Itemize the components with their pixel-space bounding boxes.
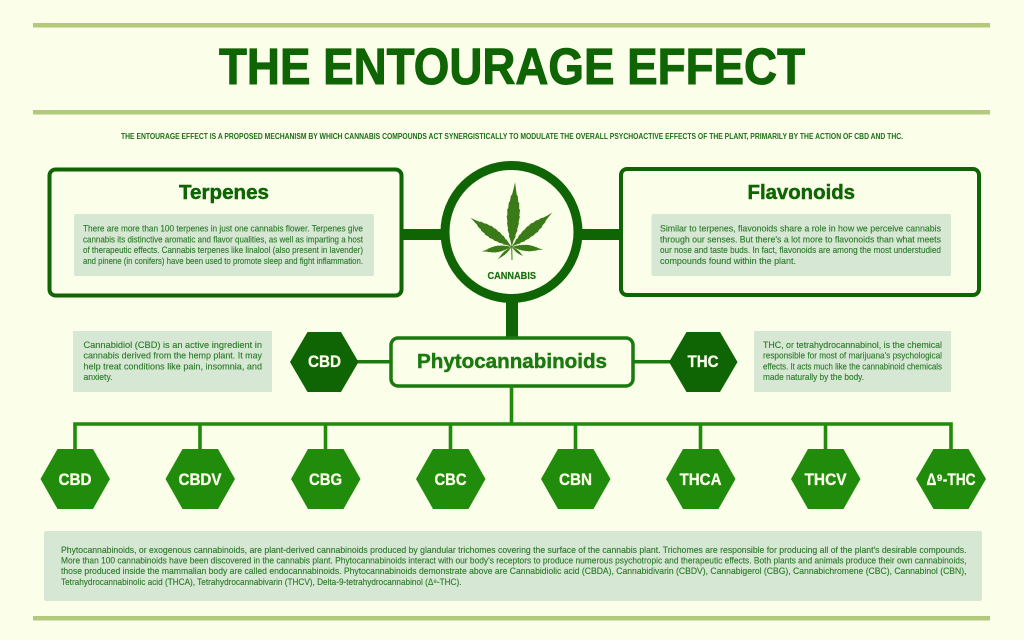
text block: CBD: help treat conditions like pain, insomnia, and	[84, 362, 262, 372]
hexagon: THCA: THCA	[680, 470, 722, 489]
text block: THC: made naturally by the body.	[763, 372, 864, 382]
text block: terpenes	[74, 214, 374, 276]
panel: phytocannabinoids: Phytocannabinoids	[417, 351, 607, 373]
branch connectors	[75, 386, 951, 451]
text block: flavonoids: our nose and taste buds. In fact, flavonoids are among the most understudied	[660, 245, 941, 255]
panel: flavonoids	[621, 169, 979, 295]
hexagon: CBC	[416, 449, 486, 509]
text block: THC	[754, 331, 951, 392]
text block: flavonoids: compounds found within the plant.	[660, 256, 796, 266]
text block: terpenes: There are more than 100 terpenes in just one cannabis flower. Terpenes give	[83, 224, 363, 234]
text block: flavonoids	[652, 214, 951, 276]
text block: flavonoids: through our senses. But there's a lot more to flavonoids than what meets	[660, 234, 942, 244]
panel: phytocannabinoids	[391, 338, 633, 386]
hexagon: delta-9-THC: Δ⁹-THC	[926, 470, 976, 489]
hexagon: CBD: CBD	[308, 352, 341, 371]
text block: CBD: cannabis derived from the hemp plant. It may	[84, 350, 263, 360]
hexagons: cannabinoids	[40, 449, 986, 509]
hexagon: CBDV: CBDV	[178, 470, 222, 489]
title: THE ENTOURAGE EFFECT	[219, 38, 805, 95]
cannabis circle	[445, 166, 578, 298]
text block: CBD: anxiety.	[84, 372, 112, 382]
text block: CBD	[73, 331, 272, 392]
connector: cannabis to flavonoids	[577, 229, 620, 240]
connector: terpenes to cannabis	[402, 229, 446, 240]
hexagon: CBG: CBG	[309, 470, 342, 489]
text block: phytocannabinoids description: Phytocannabinoids, or exogenous cannabinoids, are plant-derived cannabinoids produced by glandular trichomes covering the surface of the cannabis plant. Trichomes are responsible for producing all of the plant's desirable compounds.	[61, 545, 966, 555]
text block: THC: effects. It acts much like the cannabinoid chemicals	[763, 362, 943, 372]
hexagon: THCV	[791, 449, 860, 509]
hexagon: CBD	[40, 449, 110, 509]
text block: terpenes: of therapeutic effects. Cannabis terpenes like linalool (also present in lavender)	[83, 245, 363, 255]
label: cannabis: CANNABIS	[488, 271, 536, 282]
connector: CBD to phytocannabinoids	[356, 360, 391, 364]
text block: THC: responsible for most of marijuana's psychological	[763, 350, 942, 360]
text block: terpenes: cannabis its distinctive aromatic and flavor qualities, as well as imparting a host	[83, 234, 363, 244]
connector: phytocannabinoids to THC	[633, 360, 670, 364]
text block: phytocannabinoids description: More than 100 cannabinoids have been discovered in the cannabis plant. Phytocannabinoids interact with our body's receptors to produce numerous psychotropic and therapeutic effects. Both plants and animals produce their own cannabinoids,	[61, 556, 966, 566]
hexagon: CBD: CBD	[58, 470, 92, 489]
hexagon: CBN	[541, 449, 610, 509]
hexagon: delta-9-THC	[916, 449, 986, 509]
text block: THC: THC, or tetrahydrocannabinol, is the chemical	[763, 340, 942, 350]
heading: terpenes: Terpenes	[179, 182, 269, 204]
hexagon: CBDV	[166, 449, 235, 509]
hexagon: CBD	[290, 332, 358, 392]
text block: phytocannabinoids description: Tetrahydrocannabinolic acid (THCA), Tetrahydrocannabivarin (THCV), Delta-9-tetrahydrocannabinol (Δ⁹-THC).	[61, 577, 462, 587]
hexagon: THCV: THCV	[804, 470, 847, 489]
hexagon: CBC: CBC	[434, 470, 466, 489]
hexagon: THCA	[666, 449, 736, 509]
panel: terpenes	[50, 170, 402, 296]
text block: phytocannabinoids description: those produced inside the mammalian body are called endocannabinoids. Phytocannabinoids demonstrate above are Cannabidiolic acid (CBDA), Cannabidivarin (CBDV), Cannabigerol (CBG), Cannabichromene (CBC), Cannabinol (CBN),	[61, 566, 966, 576]
hexagon: CBG	[291, 449, 360, 509]
icon: cannabis leaf	[467, 182, 556, 261]
hexagon: THC: THC	[688, 352, 718, 371]
text block: flavonoids: Similar to terpenes, flavonoids share a role in how we perceive cannabis	[660, 224, 942, 234]
text block: CBD: Cannabidiol (CBD) is an active ingredient in	[84, 340, 262, 350]
heading: flavonoids: Flavonoids	[748, 182, 855, 204]
connector: cannabis to phytocannabinoids	[506, 296, 518, 338]
hexagon: THC	[669, 332, 738, 392]
text block: phytocannabinoids description	[44, 531, 982, 601]
hexagon: CBN: CBN	[559, 470, 592, 489]
text block: terpenes: and pinene (in conifers) have been used to promote sleep and fight inflammation.	[83, 256, 363, 266]
